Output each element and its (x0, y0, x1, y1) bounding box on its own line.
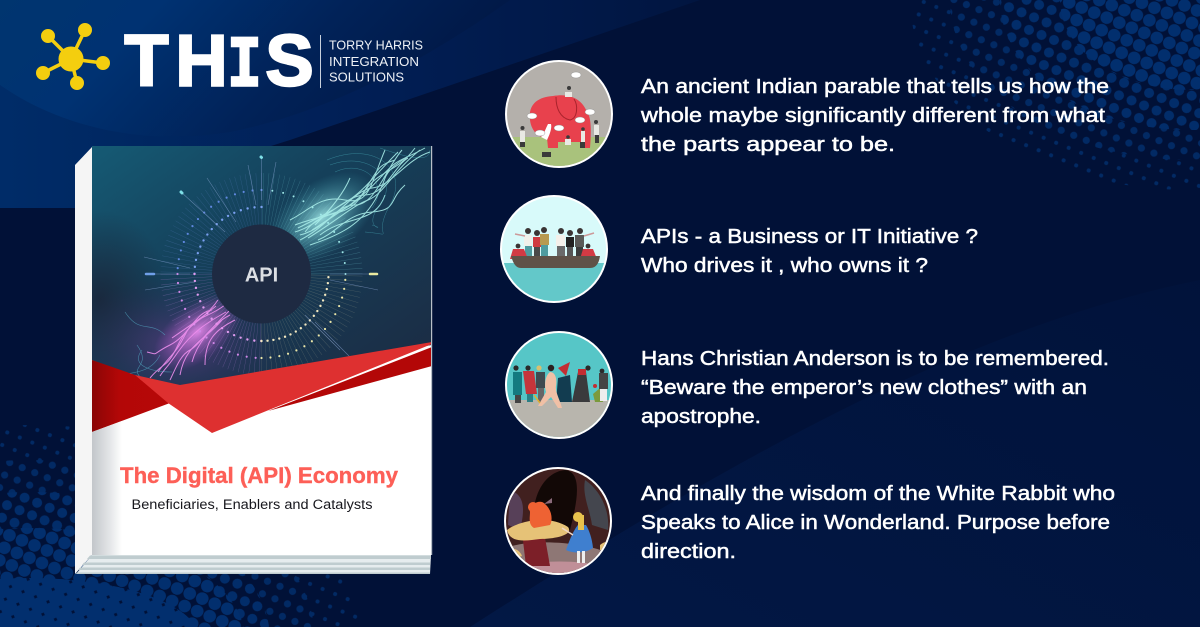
text block: business or IT: Who drives it , who owns it ? (641, 255, 928, 277)
logo wordmark: S (266, 22, 314, 102)
cover title: The Digital (API) Economy (120, 463, 398, 488)
illustration: people in a boat (500, 195, 608, 303)
book page block (76, 555, 431, 574)
logo tagline: TORRY HARRIS (329, 38, 423, 52)
logo (36, 22, 423, 108)
text block: white rabbit: direction. (641, 541, 736, 563)
text block: parable: An ancient Indian parable that tells us how the (641, 76, 1109, 98)
API circle (212, 224, 311, 324)
text block: emperor's new clothes: “Beware the emperor’s new clothes” with an (641, 377, 1087, 399)
illustration: emperor's new clothes (505, 331, 613, 440)
icon: network hub (36, 24, 110, 90)
book (75, 146, 432, 574)
logo tagline (329, 38, 423, 84)
cover subtitle: Beneficiaries, Enablers and Catalysts (132, 497, 373, 512)
logo wordmark: H (176, 22, 228, 102)
text block: business or IT (641, 226, 978, 277)
cover spine shading (92, 421, 122, 555)
logo tagline: INTEGRATION (329, 55, 419, 69)
radial burst (105, 148, 430, 385)
book spine edge (75, 147, 92, 574)
text block: white rabbit (641, 483, 1115, 563)
illustration: alice and the caterpillar (504, 467, 612, 575)
text block: emperor's new clothes: Hans Christian Anderson is to be remembered. (641, 348, 1109, 370)
logo wordmark: T (124, 22, 168, 102)
text block: white rabbit: Speaks to Alice in Wonderland. Purpose before (641, 512, 1110, 534)
logo tagline: SOLUTIONS (329, 70, 404, 84)
text block: emperor's new clothes: apostrophe. (641, 406, 761, 428)
illustration: blind men and the elephant (505, 60, 613, 169)
cover red banner (92, 342, 432, 433)
API circle: API (245, 264, 278, 286)
text block: parable (640, 76, 1109, 156)
text block: white rabbit: And finally the wisdom of the White Rabbit who (641, 483, 1115, 505)
logo wordmark letter I: I (228, 26, 262, 108)
pink data streams (147, 300, 235, 380)
cyan data streams (290, 148, 430, 245)
text block: parable: the parts appear to be. (641, 134, 895, 156)
text block: business or IT: APIs - a Business or IT Initiative ? (641, 226, 978, 248)
text block: emperor's new clothes (641, 348, 1109, 428)
book cover (92, 146, 431, 555)
cover artwork (92, 146, 431, 385)
text block: parable: whole maybe significantly different from what (640, 105, 1106, 127)
